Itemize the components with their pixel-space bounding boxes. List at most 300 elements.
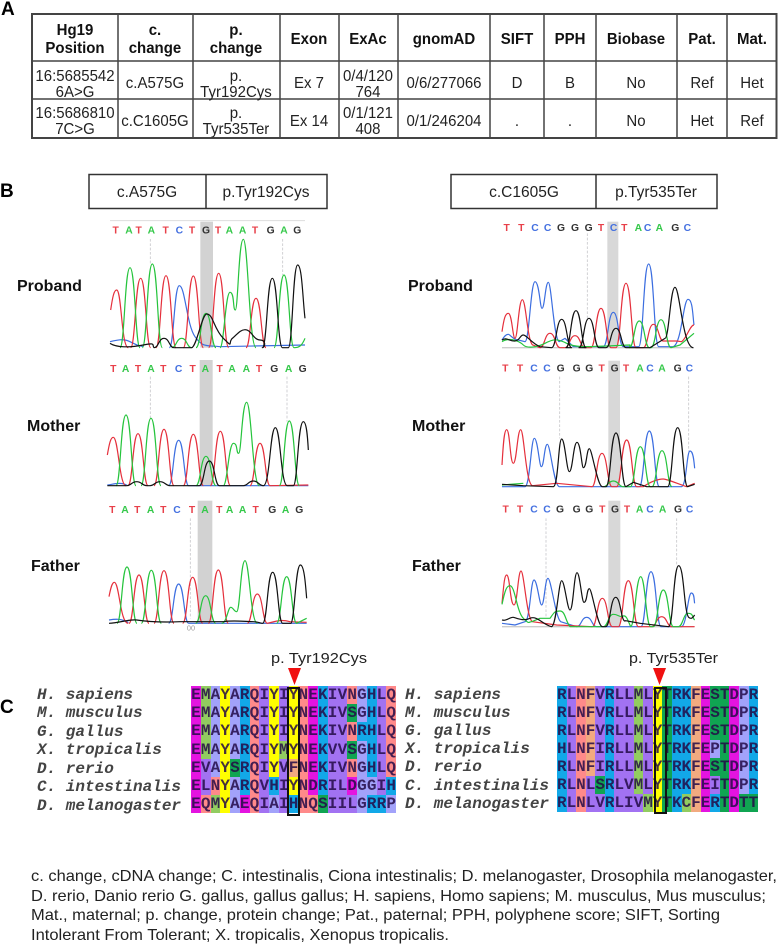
table: variant summary: Exon <box>291 31 327 48</box>
alignment right: Tyr535 region: T <box>720 686 729 704</box>
arrow: red triangle left <box>288 668 301 685</box>
chromatogram: proband c.A575G: T <box>163 226 170 237</box>
alignment right: Tyr535 region: K <box>682 704 691 722</box>
chromatogram: father c.A575G: A <box>121 505 129 516</box>
table: variant summary: . <box>515 113 519 130</box>
alignment left: Tyr192 region: L <box>377 759 386 777</box>
alignment left: Tyr192 region: I <box>259 741 269 759</box>
chromatogram: mother c.A575G: G <box>299 364 307 375</box>
alignment right: Tyr535 region: F <box>691 740 701 758</box>
chromatogram: proband c.C1605G: G <box>585 223 593 234</box>
table: variant summary: change <box>210 40 263 57</box>
species labels left: D. rerio <box>37 760 114 778</box>
alignment right: Tyr535 region: K <box>672 794 682 812</box>
alignment right: Tyr535 region: Y <box>653 686 662 704</box>
alignment right: Tyr535 region: M <box>643 794 653 812</box>
alignment right: Tyr535 region: P <box>739 686 749 704</box>
alignment right: Tyr535 region: N <box>576 758 586 776</box>
alignment left: Tyr192 region: G <box>357 704 367 722</box>
footnote: abbreviations: D. rerio, Danio rerio G. gallus, gallus gallus; H. sapiens, Homo sapiens; M. musculus, Mus musculus; <box>31 888 766 905</box>
alignment right: Tyr535 region: F <box>691 722 701 740</box>
alignment left: Tyr192 region: I <box>279 686 289 704</box>
table: variant summary: p. <box>229 22 243 39</box>
alignment right: Tyr535 region: L <box>614 758 624 776</box>
table: variant summary: Mat. <box>737 31 767 48</box>
species labels left <box>36 686 181 815</box>
species labels right: G. gallus <box>405 722 491 740</box>
alignment right: Tyr535 region: F <box>691 704 701 722</box>
alignment right: Tyr535 region: L <box>567 758 576 776</box>
species labels left: X. tropicalis <box>37 741 162 759</box>
label: Father right: Father <box>412 558 461 575</box>
alignment right: Tyr535 region: Y <box>653 758 662 776</box>
alignment right: Tyr535 region: I <box>595 740 605 758</box>
alignment left: Tyr192 region: Y <box>220 686 230 704</box>
header box: c.A575G p.Tyr192Cys <box>89 174 327 209</box>
alignment right: Tyr535 region: L <box>643 686 653 704</box>
table: variant summary: ExAc <box>349 31 387 48</box>
chromatogram: mother c.A575G: T <box>135 364 142 375</box>
alignment right: Tyr535 region: Y <box>653 704 662 722</box>
chromatogram: proband c.A575G: T <box>113 226 120 237</box>
alignment left: Tyr192 region: I <box>328 686 337 704</box>
panel label C: C <box>0 697 14 718</box>
chromatogram: father c.C1605G <box>502 501 695 627</box>
alignment left: Tyr192 region: E <box>191 704 201 722</box>
alignment right: Tyr535 region: L <box>567 740 576 758</box>
chromatogram: father c.A575G <box>109 501 307 632</box>
alignment right: Tyr535 region: D <box>729 704 739 722</box>
label: Proband left: Proband <box>17 278 82 295</box>
alignment left: Tyr192 region: Y <box>269 759 279 777</box>
chromatogram: father c.A575G: A <box>147 505 155 516</box>
alignment left: Tyr192 region: K <box>318 741 328 759</box>
species labels right: C. intestinalis <box>405 777 549 795</box>
alignment left: Tyr192 region: A <box>230 795 240 813</box>
alignment left: Tyr192 region: A <box>230 741 240 759</box>
alignment right: Tyr535 region: R <box>605 794 614 812</box>
table: variant summary: Pat. <box>688 31 716 48</box>
alignment right: Tyr535 region: L <box>586 776 595 794</box>
table: variant summary: 16:5686810 <box>35 105 115 122</box>
chromatogram: proband c.C1605G: T <box>598 223 605 234</box>
chromatogram: mother c.C1605G: T <box>599 363 606 374</box>
alignment right: Tyr535 region: N <box>576 704 586 722</box>
species labels right: M. musculus <box>405 704 511 722</box>
chromatogram: father c.C1605G: C <box>543 504 551 515</box>
chromatogram: proband c.A575G: A <box>226 226 234 237</box>
label: p. Tyr535Ter: p. Tyr535Ter <box>629 650 718 667</box>
species labels right: H. sapiens <box>405 686 501 704</box>
chromatogram: mother c.A575G: A <box>228 364 236 375</box>
alignment left: Tyr192 region: Y <box>220 722 230 740</box>
chromatogram: proband c.C1605G: A <box>635 223 643 234</box>
alignment left: Tyr192 region: H <box>367 759 376 777</box>
chromatogram: proband c.A575G: T <box>215 226 222 237</box>
table: variant summary: Tyr192Cys <box>200 84 272 101</box>
alignment left: Tyr192 region: L <box>347 795 357 813</box>
chromatogram: mother c.C1605G <box>502 361 695 487</box>
alignment left: Tyr192 region: V <box>259 777 269 795</box>
alignment left: Tyr192 region: N <box>347 759 357 777</box>
alignment left: Tyr192 region: K <box>318 759 328 777</box>
table: variant summary: 0/4/120 <box>343 68 393 85</box>
alignment left: Tyr192 region: A <box>230 722 240 740</box>
alignment left: Tyr192 region: E <box>308 704 318 722</box>
alignment right: Tyr535 region: R <box>672 704 682 722</box>
alignment left: Tyr192 region: M <box>201 704 210 722</box>
table: variant summary: PPH <box>555 31 585 48</box>
alignment right: Tyr535 region: R <box>557 686 567 704</box>
alignment right: Tyr535 region: F <box>691 686 701 704</box>
alignment right: Tyr535 region: E <box>701 758 710 776</box>
chromatogram: proband c.C1605G <box>502 222 694 348</box>
alignment left: Tyr192 region: P <box>386 795 396 813</box>
alignment right: Tyr535 region: M <box>634 758 643 776</box>
chromatogram: proband c.A575G: G <box>293 226 301 237</box>
species labels right: D. melanogaster <box>405 795 549 813</box>
alignment left: Tyr192 region: M <box>211 795 220 813</box>
alignment right: Tyr535 region: F <box>586 740 595 758</box>
chromatogram: proband c.A575G: T <box>189 226 196 237</box>
chromatogram: mother c.A575G: T <box>217 364 224 375</box>
alignment left: Tyr192 region: H <box>367 686 376 704</box>
alignment left: Tyr192 region: A <box>211 741 220 759</box>
chromatogram: father c.A575G: T <box>109 505 116 516</box>
chromatogram: father c.A575G: A <box>239 505 247 516</box>
alignment right: Tyr535 region: R <box>672 740 682 758</box>
chromatogram: father c.C1605G: T <box>517 504 524 515</box>
chromatogram: proband c.C1605G: A <box>656 223 664 234</box>
chromatogram: father c.A575G: A <box>282 505 290 516</box>
alignment right: Tyr535 region: V <box>595 704 605 722</box>
alignment left: Tyr192 region: Y <box>289 686 298 704</box>
table: variant summary: Position <box>45 40 105 57</box>
alignment right: Tyr535 region: V <box>624 776 634 794</box>
alignment right: Tyr535 region: S <box>595 776 605 794</box>
alignment left: Tyr192 region: Y <box>289 722 298 740</box>
table: variant summary: Hg19 <box>57 22 94 39</box>
alignment left: Tyr192 region: N <box>298 759 308 777</box>
alignment right: Tyr535 region: L <box>586 794 595 812</box>
alignment right: Tyr535 region: R <box>749 740 758 758</box>
chromatogram: proband c.A575G: G <box>202 226 210 237</box>
alignment left: Tyr192 region: A <box>211 686 220 704</box>
alignment right: Tyr535 region: R <box>605 686 614 704</box>
alignment right: Tyr535 region: T <box>720 758 729 776</box>
alignment right: Tyr535 region: R <box>749 776 758 794</box>
alignment right: Tyr535 region: R <box>672 758 682 776</box>
chromatogram: mother c.A575G: A <box>147 364 155 375</box>
alignment right: Tyr535 region: L <box>614 722 624 740</box>
chromatogram: mother c.A575G: A <box>122 364 130 375</box>
chromatogram: proband c.C1605G: G <box>571 223 579 234</box>
alignment left: Tyr192 region: Q <box>250 741 259 759</box>
alignment right: Tyr535 region: V <box>595 686 605 704</box>
alignment right: Tyr535 region: K <box>682 740 691 758</box>
alignment right: Tyr535 region: T <box>720 740 729 758</box>
alignment right: Tyr535 region: E <box>701 740 710 758</box>
chromatogram: mother c.A575G: A <box>285 364 293 375</box>
alignment left: Tyr192 region: H <box>367 704 376 722</box>
alignment right: Tyr535 region: R <box>557 722 567 740</box>
alignment right: Tyr535 region: R <box>672 686 682 704</box>
alignment left: Tyr192 region: N <box>347 686 357 704</box>
chromatogram: father c.C1605G: T <box>624 504 631 515</box>
alignment right: Tyr535 region: M <box>634 740 643 758</box>
alignment left: Tyr192 region: G <box>357 777 367 795</box>
alignment left: Tyr192 region: L <box>377 722 386 740</box>
alignment left: Tyr192 region: Q <box>250 795 259 813</box>
highlight box left <box>286 687 300 816</box>
alignment right: Tyr535 region: L <box>643 704 653 722</box>
label: Mother right: Mother <box>412 418 465 435</box>
alignment right: Tyr535 region: F <box>586 722 595 740</box>
alignment right: Tyr535 region: K <box>682 758 691 776</box>
alignment right: Tyr535 region: L <box>567 776 576 794</box>
alignment left: Tyr192 region: K <box>318 722 328 740</box>
alignment right: Tyr535 region: F <box>691 758 701 776</box>
alignment right: Tyr535 region: T <box>662 704 672 722</box>
alignment right: Tyr535 region: R <box>749 722 758 740</box>
chromatogram: father c.A575G: T <box>134 505 141 516</box>
alignment right: Tyr535 region: I <box>595 758 605 776</box>
alignment right: Tyr535 region: L <box>614 740 624 758</box>
table: variant summary: SIFT <box>501 31 534 48</box>
alignment right: Tyr535 region: T <box>662 776 672 794</box>
highlight box right <box>654 687 666 814</box>
alignment right: Tyr535 region: D <box>729 776 739 794</box>
table: variant summary: p. <box>230 68 242 85</box>
table: variant summary: 6A>G <box>56 84 94 101</box>
alignment right: Tyr535 region: L <box>643 758 653 776</box>
table: variant summary: change <box>129 40 182 57</box>
chromatogram: mother c.C1605G: T <box>623 363 630 374</box>
alignment right: Tyr535 region: M <box>634 704 643 722</box>
chromatogram: father c.A575G: C <box>173 505 181 516</box>
alignment left: Tyr192 region: A <box>230 777 240 795</box>
chromatogram: proband c.A575G: A <box>280 226 288 237</box>
chromatogram: father c.A575G: T <box>189 505 196 516</box>
chromatogram: father c.C1605G: T <box>503 504 510 515</box>
alignment right: Tyr535 region: P <box>710 740 720 758</box>
alignment left: Tyr192 region: H <box>386 777 396 795</box>
alignment left: Tyr192 region: N <box>298 686 308 704</box>
alignment right: Tyr535 region: H <box>557 740 567 758</box>
alignment right: Tyr535 region: R <box>749 686 758 704</box>
alignment left: Tyr192 region: I <box>259 704 269 722</box>
footnote: abbreviations: Intolerant From Tolerant; X. tropicalis, Xenopus tropicalis. <box>31 927 449 944</box>
alignment right: Tyr535 region: L <box>614 776 624 794</box>
header box: c.C1605G p.Tyr535Ter: c.C1605G <box>489 184 559 201</box>
alignment right: Tyr535 region: V <box>595 722 605 740</box>
alignment right: Tyr535 region: R <box>557 704 567 722</box>
header box: c.A575G p.Tyr192Cys: c.A575G <box>117 184 177 201</box>
alignment left: Tyr192 region: V <box>338 722 347 740</box>
chromatogram: proband c.C1605G: C <box>544 223 552 234</box>
alignment left: Tyr192 region: N <box>347 722 357 740</box>
table: variant summary: c.C1605G <box>121 113 189 130</box>
alignment right: Tyr535 region: F <box>691 794 701 812</box>
alignment left: Tyr192 region: V <box>201 759 210 777</box>
chromatogram: mother c.A575G: T <box>110 364 117 375</box>
alignment left: Tyr192 region: Q <box>250 722 259 740</box>
alignment left: Tyr192 region <box>191 686 396 813</box>
alignment left: Tyr192 region: Y <box>220 795 230 813</box>
table: variant summary: Het <box>740 75 764 92</box>
alignment right: Tyr535 region: R <box>749 758 758 776</box>
chromatogram: mother c.A575G <box>107 360 308 486</box>
alignment left: Tyr192 region: I <box>279 777 289 795</box>
alignment left: Tyr192 region: G <box>357 759 367 777</box>
alignment left: Tyr192 region: R <box>240 686 250 704</box>
chromatogram: mother c.A575G: T <box>256 364 263 375</box>
alignment right: Tyr535 region: S <box>710 722 720 740</box>
alignment left: Tyr192 region: I <box>279 722 289 740</box>
alignment left: Tyr192 region: N <box>298 722 308 740</box>
chromatogram: mother c.A575G: A <box>243 364 251 375</box>
alignment right: Tyr535 region: T <box>720 704 729 722</box>
alignment left: Tyr192 region: N <box>298 795 308 813</box>
chromatogram: father c.A575G: G <box>295 505 303 516</box>
alignment right: Tyr535 region: P <box>739 704 749 722</box>
alignment left: Tyr192 region: L <box>377 704 386 722</box>
chromatogram: mother c.C1605G: A <box>658 363 666 374</box>
table: variant summary: Ex 7 <box>294 75 324 92</box>
chromatogram: father c.C1605G: T <box>599 504 606 515</box>
alignment left: Tyr192 region: I <box>259 795 269 813</box>
alignment right: Tyr535 region: L <box>567 722 576 740</box>
alignment left: Tyr192 region: Y <box>269 686 279 704</box>
chromatogram: proband c.C1605G: C <box>684 223 692 234</box>
alignment right: Tyr535 region: N <box>576 794 586 812</box>
chromatogram: mother c.C1605G: G <box>585 363 593 374</box>
alignment right: Tyr535 region: R <box>605 704 614 722</box>
alignment left: Tyr192 region: Q <box>308 795 318 813</box>
alignment left: Tyr192 region: E <box>308 759 318 777</box>
alignment left: Tyr192 region: S <box>230 759 240 777</box>
alignment right: Tyr535 region: R <box>672 776 682 794</box>
chromatogram: mother c.C1605G: G <box>611 363 619 374</box>
chromatogram: father c.C1605G: C <box>646 504 654 515</box>
table: variant summary: D <box>512 75 522 92</box>
chromatogram: proband c.C1605G: C <box>610 223 618 234</box>
chromatogram: proband c.A575G: A <box>125 226 133 237</box>
alignment left: Tyr192 region: A <box>230 704 240 722</box>
chromatogram: father c.A575G: T <box>160 505 167 516</box>
alignment left: Tyr192 region: R <box>240 759 250 777</box>
chromatogram: mother c.C1605G: C <box>686 363 694 374</box>
chromatogram: father c.A575G: T <box>253 505 260 516</box>
alignment left: Tyr192 region: I <box>338 795 347 813</box>
alignment left: Tyr192 region: Y <box>289 741 298 759</box>
alignment left: Tyr192 region: I <box>259 722 269 740</box>
alignment right: Tyr535 region: R <box>710 794 720 812</box>
table: variant summary: 0/6/277066 <box>406 75 482 92</box>
alignment right: Tyr535 region: L <box>643 776 653 794</box>
table: variant summary: . <box>568 113 572 130</box>
alignment right: Tyr535 region: C <box>682 794 691 812</box>
alignment left: Tyr192 region: R <box>377 795 386 813</box>
alignment left: Tyr192 region: G <box>357 686 367 704</box>
alignment left: Tyr192 region: I <box>328 795 337 813</box>
chromatogram: father c.A575G: 00 <box>187 623 195 632</box>
alignment left: Tyr192 region: Q <box>386 722 396 740</box>
alignment left: Tyr192 region: F <box>289 759 298 777</box>
alignment right: Tyr535 region: Y <box>653 776 662 794</box>
alignment right: Tyr535 region: T <box>662 794 672 812</box>
species labels left: M. musculus <box>37 704 143 722</box>
alignment left: Tyr192 region: R <box>240 704 250 722</box>
chromatogram: mother c.C1605G: G <box>557 363 565 374</box>
chromatogram: father c.C1605G: G <box>573 504 581 515</box>
species labels left: D. melanogaster <box>37 797 181 815</box>
alignment right: Tyr535 region: N <box>576 740 586 758</box>
alignment right: Tyr535 region: S <box>710 758 720 776</box>
alignment left: Tyr192 region: Y <box>269 704 279 722</box>
alignment left: Tyr192 region: D <box>308 777 318 795</box>
chromatogram: father c.C1605G: A <box>636 504 644 515</box>
alignment right: Tyr535 region: R <box>605 758 614 776</box>
chromatogram: proband c.A575G: T <box>136 226 143 237</box>
alignment left: Tyr192 region: A <box>211 759 220 777</box>
alignment left: Tyr192 region: Q <box>386 741 396 759</box>
alignment right: Tyr535 region: R <box>557 794 567 812</box>
alignment right: Tyr535 region: M <box>634 776 643 794</box>
table: variant summary: Biobase <box>607 31 666 48</box>
chromatogram: mother c.C1605G: C <box>646 363 654 374</box>
alignment right: Tyr535 region: K <box>682 686 691 704</box>
alignment left: Tyr192 region: Q <box>386 759 396 777</box>
footnote: abbreviations: Mat., maternal; p. change, protein change; Pat., paternal; PPH, polyphene score; SIFT, Sorting <box>31 907 720 924</box>
alignment left: Tyr192 region: Q <box>386 704 396 722</box>
alignment left: Tyr192 region: I <box>259 686 269 704</box>
alignment left: Tyr192 region: Q <box>386 686 396 704</box>
alignment right: Tyr535 region: T <box>749 794 758 812</box>
chromatogram: father c.C1605G: C <box>530 504 538 515</box>
alignment left: Tyr192 region: S <box>347 741 357 759</box>
alignment right: Tyr535 region: I <box>710 776 720 794</box>
alignment left: Tyr192 region: I <box>279 704 289 722</box>
alignment left: Tyr192 region: V <box>338 686 347 704</box>
alignment right: Tyr535 region: R <box>605 740 614 758</box>
alignment right: Tyr535 region: V <box>595 794 605 812</box>
alignment left: Tyr192 region: N <box>298 741 308 759</box>
table: variant summary: Tyr535Ter <box>203 121 269 138</box>
alignment right: Tyr535 region: L <box>624 686 634 704</box>
alignment left: Tyr192 region: R <box>318 777 328 795</box>
alignment right: Tyr535 region: L <box>624 722 634 740</box>
alignment right: Tyr535 region: L <box>567 686 576 704</box>
species labels right: X. tropicalis <box>405 740 530 758</box>
alignment left: Tyr192 region: M <box>279 741 289 759</box>
chromatogram: proband c.C1605G: T <box>621 223 628 234</box>
alignment left: Tyr192 region: M <box>201 686 210 704</box>
alignment right: Tyr535 region: E <box>701 686 710 704</box>
alignment right: Tyr535 region: L <box>614 686 624 704</box>
alignment left: Tyr192 region: Y <box>289 704 298 722</box>
table: variant summary: 408 <box>355 121 380 138</box>
chromatogram: proband c.C1605G: T <box>504 223 511 234</box>
table: variant summary: 16:5685542 <box>35 68 115 85</box>
alignment right: Tyr535 region: T <box>720 794 729 812</box>
alignment right: Tyr535 region: M <box>634 686 643 704</box>
alignment left: Tyr192 region: L <box>377 686 386 704</box>
alignment right: Tyr535 region: P <box>739 776 749 794</box>
alignment right: Tyr535 region: F <box>586 686 595 704</box>
alignment left: Tyr192 region: Q <box>250 759 259 777</box>
table: variant summary: gnomAD <box>413 31 475 48</box>
